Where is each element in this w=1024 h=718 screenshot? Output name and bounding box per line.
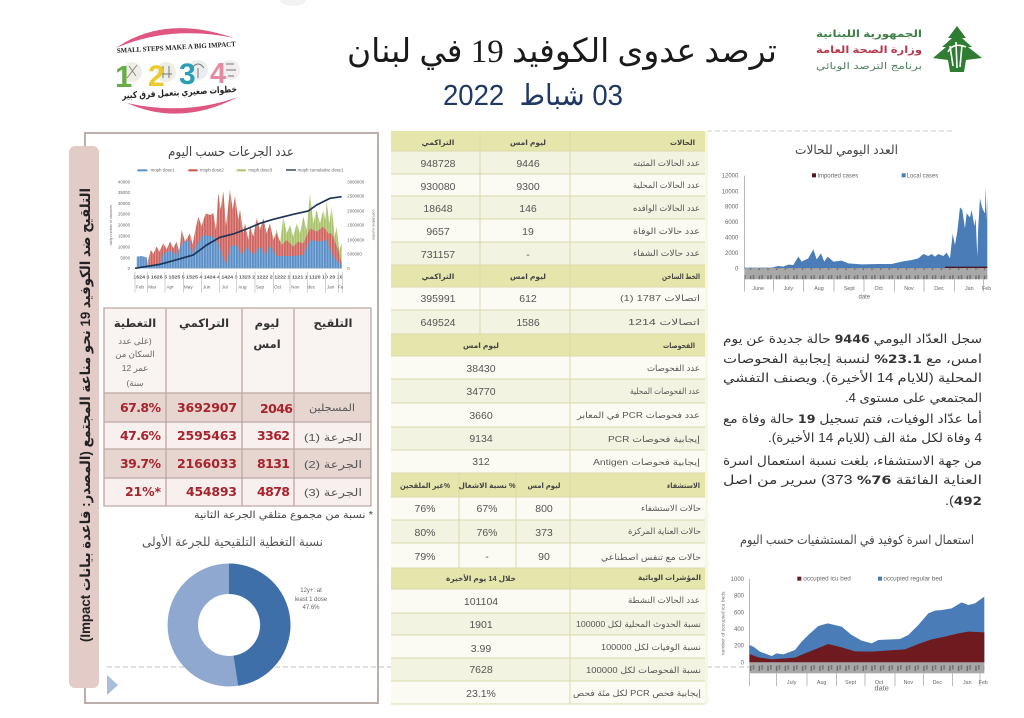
chart: daily vaccine doses: 10000	[118, 244, 131, 249]
chart: daily cases: 12000	[722, 174, 739, 180]
rows: tests: عدد الفحوصات المحلية	[630, 386, 700, 396]
chart: hospital bed occupancy: 600	[734, 610, 745, 616]
donut chart: first dose coverage: 47.6%	[302, 605, 320, 611]
rows: cases: 18648	[423, 203, 453, 215]
chart: daily cases: Local cases	[907, 173, 938, 179]
table: vaccination: المسجلين	[309, 403, 355, 414]
text block: daily summary: من جهة الاستشفاء، بلغت نسبة استعمال اسرة	[723, 454, 982, 469]
chart: hospital bed occupancy: July	[787, 680, 797, 686]
text block: daily summary: 4 وفاة لكل مئة الف (للايام 14 الأخيرة).	[768, 430, 982, 446]
chart: daily vaccine doses: 500000	[347, 252, 362, 257]
rows: epidemiological indicators: نسبة الحدوث المحلية لكل 100000	[576, 619, 701, 629]
rows: cases: عدد حالات الشفاء	[633, 248, 700, 258]
chart: daily vaccine doses: moph dose1	[151, 168, 175, 173]
table: vaccination: عمر 12	[122, 363, 148, 373]
rows: epidemiological indicators	[446, 573, 701, 700]
rows: hospitalisation: ليوم امس	[528, 481, 561, 490]
rows: hospitalisation: 80%	[414, 527, 436, 539]
chart: daily cases: 6000	[725, 220, 739, 226]
rows: tests: إيجابية فحوصات Antigen	[593, 457, 700, 468]
ministry wordmark: وزارة الصحة العامة	[816, 45, 922, 56]
chart: hospital bed occupancy: Sept	[845, 680, 857, 686]
logo: small steps make a big impact: 1	[115, 59, 132, 94]
logo: small steps make a big impact: 3	[179, 58, 196, 91]
chart: hospital bed occupancy: 0	[741, 660, 745, 666]
chart: daily vaccine doses: moph cumulative dose1	[298, 168, 344, 173]
chart: daily cases: 2000	[725, 251, 739, 257]
chart: daily vaccine doses: Feb	[136, 285, 144, 290]
chart: hospital bed occupancy	[720, 576, 988, 693]
ministry wordmark	[816, 29, 922, 71]
rows: cases: 930080	[420, 181, 456, 193]
chart: daily cases: 4000	[725, 235, 739, 241]
table: vaccination: 2166033	[177, 456, 237, 471]
chart: daily vaccine doses: May	[184, 285, 193, 290]
rows: hotline: 612	[519, 293, 537, 305]
rows: tests: عدد الفحوصات	[647, 363, 700, 373]
rows: tests: 38430	[466, 363, 496, 375]
rows: tests: عدد فحوصات PCR في المعابر	[576, 410, 700, 420]
chart: daily vaccine doses: 35000	[118, 190, 131, 195]
chart: daily vaccine doses: 25000	[118, 212, 131, 217]
rows: hospitalisation: %غير الملقحين	[400, 481, 450, 490]
chart: daily vaccine doses: 40000	[118, 179, 131, 184]
rows: cases: 9446	[516, 158, 540, 170]
table: vaccination: 3362	[257, 428, 290, 443]
rows: hotline: اتصالات 1214	[628, 317, 700, 327]
chart: hospital bed occupancy: Feb	[979, 680, 988, 686]
rows: hospitalisation: 90	[538, 551, 550, 563]
rows: hospitalisation: حالات العناية المركزة	[628, 526, 701, 536]
rows: tests: 34770	[466, 386, 496, 398]
table: vaccination: ليوم	[255, 318, 279, 331]
rows: hotline: 395991	[420, 293, 456, 305]
chart: daily cases: Aug	[814, 286, 824, 292]
chart: daily vaccine doses	[109, 168, 376, 293]
ministry wordmark: برنامج الترصد الوبائي	[816, 61, 922, 71]
chart: daily vaccine doses: Nov	[291, 285, 300, 290]
table: vaccination: 4878	[257, 484, 290, 499]
rows: hospitalisation: 76%	[414, 503, 436, 515]
chart: daily vaccine doses: Fe	[338, 285, 344, 290]
rows: hospitalisation	[400, 481, 701, 563]
table: vaccination: 2046	[260, 401, 293, 416]
chart: daily cases: Oct	[875, 286, 883, 292]
rows: tests: 3660	[469, 410, 493, 422]
chart: hospital bed occupancy: number of occupied icu beds	[720, 591, 726, 655]
chart: hospital bed occupancy: 800	[734, 594, 745, 600]
chart: hospital bed occupancy: Nov	[904, 680, 913, 686]
chart: daily vaccine doses: Jul	[222, 285, 228, 290]
chart: daily vaccine doses: moph dose3	[248, 168, 273, 173]
icon: cedar tree with hand	[933, 26, 982, 72]
rows: hospitalisation: 373	[535, 527, 553, 539]
ministry wordmark: الجمهورية اللبنانية	[816, 29, 922, 40]
chart: hospital bed occupancy: 400	[734, 627, 745, 633]
table: vaccination: سنة)	[126, 378, 144, 388]
text block: daily summary: المحلية (للايام 14 الأخيرة). ويصنف التفشي	[723, 370, 982, 386]
rows: tests: إيجابية فحوصات PCR	[608, 434, 700, 445]
rows: hospitalisation: 67%	[476, 503, 498, 515]
chart: hospital bed occupancy: Aug	[817, 680, 826, 686]
rows: hotline: التراكمي	[422, 272, 454, 281]
rows: epidemiological indicators: 7628	[469, 664, 493, 676]
rows: tests: ليوم امس	[463, 341, 499, 350]
chart: hospital bed occupancy: occupied icu bed	[803, 576, 851, 583]
rows: hotline: ليوم امس	[510, 272, 546, 281]
table: vaccination: الجرعة (2)	[304, 459, 362, 471]
text block: daily summary: 492).	[945, 494, 982, 508]
rows: tests: 312	[472, 456, 490, 468]
heading: doses per day: عدد الجرعات حسب اليوم	[168, 144, 294, 160]
text block: daily summary: أما عدّاد الوفيات، فتم تسجيل 19 حالة وفاة مع	[723, 410, 982, 427]
rows: epidemiological indicators: 3.99	[471, 643, 491, 655]
text block: daily summary: المجتمعي على مستوى 4.	[845, 391, 982, 406]
rows: hospitalisation: 800	[535, 503, 553, 515]
heading: hospital beds: استعمال اسرة كوفيد في المستشفيات حسب اليوم	[740, 533, 974, 548]
text block: daily summary	[723, 332, 982, 508]
logo: small steps make a big impact: 4	[210, 58, 226, 90]
rows: hospitalisation: الاستشفاء	[667, 481, 700, 490]
chart: hospital bed occupancy: Oct	[875, 680, 884, 686]
rows: hotline: 649524	[420, 317, 456, 329]
rows: tests	[463, 341, 700, 468]
donut chart: first dose coverage	[183, 564, 328, 686]
rows: hospitalisation: حالات مع تنفس اصطناعي	[601, 552, 701, 562]
chart: hospital bed occupancy: 200	[734, 644, 745, 650]
rows: epidemiological indicators: إيجابية فحص PCR لكل مئة فحص	[573, 688, 701, 699]
rows: hospitalisation: % نسبة الاشغال	[458, 481, 516, 490]
chart: daily vaccine doses: Sep	[256, 285, 265, 290]
table: vaccination: الجرعة (3)	[304, 487, 362, 499]
rows: epidemiological indicators: نسبة الفحوصات لكل 100000	[586, 665, 701, 675]
rows: cases: 19	[522, 226, 534, 238]
table: vaccination: التلقيح	[314, 318, 352, 330]
rows: cases	[420, 138, 700, 261]
chart: daily vaccine doses: 5000	[120, 255, 131, 260]
chart: daily vaccine doses: daily number of vaccines	[109, 205, 113, 245]
rows: hotline: الخط الساخن	[662, 272, 700, 281]
rows: cases: 731157	[421, 249, 455, 261]
table: vaccination	[104, 308, 371, 506]
table: vaccination: (على عدد	[118, 336, 152, 346]
chart: daily cases: 0	[735, 266, 739, 272]
rows: tests: الفحوصات	[663, 341, 695, 350]
table: vaccination: 454893	[186, 484, 237, 499]
logo: small steps make a big impact: SMALL STEPS MAKE A BIG IMPACT	[117, 40, 236, 55]
chart: hospital bed occupancy: occupied regular bed	[883, 576, 943, 583]
chart: daily vaccine doses: Mar	[148, 285, 157, 290]
chart: daily vaccine doses: Jun	[203, 285, 211, 290]
chart: hospital bed occupancy: Jan	[963, 680, 972, 686]
donut chart: first dose coverage: least 1 dose	[295, 597, 328, 603]
chart: daily vaccine doses: 15000	[118, 234, 131, 239]
rows: cases: عدد الحالات المحلية	[633, 180, 700, 190]
table: vaccination: 39.7%	[120, 456, 161, 471]
rows: epidemiological indicators: 101104	[464, 596, 498, 608]
chart: daily cases: Imported cases	[817, 173, 858, 179]
rows: hotline: اتصالات 1787 (1)	[620, 293, 700, 303]
chart: daily vaccine doses: moph dose2	[200, 168, 224, 173]
logo: small steps make a big impact	[114, 27, 242, 117]
chart: daily vaccine doses: 2000000	[347, 208, 365, 213]
table: vaccination: 8131	[257, 456, 290, 471]
rows: hospitalisation: -	[485, 551, 489, 563]
rows: epidemiological indicators: 23.1%	[466, 688, 496, 700]
table: vaccination: 21%*	[125, 484, 161, 499]
footnote: * نسبة من مجموع متلقي الجرعة الثانية	[194, 510, 373, 521]
chart: hospital bed occupancy: 1000	[731, 577, 745, 583]
table: vaccination: 3692907	[177, 400, 237, 415]
rows: epidemiological indicators: خلال 14 يوم الأخيرة	[446, 574, 516, 583]
rows: cases: الحالات	[670, 138, 695, 147]
rows: hospitalisation: 79%	[414, 551, 436, 563]
chart: daily vaccine doses: 3000000	[347, 179, 365, 184]
chart: daily cases: Sept	[844, 286, 855, 292]
chart: daily vaccine doses: 0	[128, 266, 131, 271]
text block: daily summary: امس، مع 23.1% لنسبة إيجابية الفحوصات	[723, 352, 982, 367]
logo: small steps make a big impact: 2	[148, 60, 165, 93]
chart: daily vaccine doses: 1000000	[347, 237, 365, 242]
rows: hospitalisation: 76%	[476, 527, 498, 539]
rows: cases: التراكمي	[422, 138, 454, 147]
chart: daily cases: June	[753, 286, 764, 292]
chart: daily vaccine doses: Aug	[238, 285, 247, 290]
chart: hospital bed occupancy: date	[875, 684, 889, 693]
chart: daily vaccine doses: Oct	[274, 285, 282, 290]
donut chart: first dose coverage: 12y+: at	[300, 588, 322, 594]
rows: cases: 9300	[516, 181, 540, 193]
table: vaccination: 2595463	[177, 428, 237, 443]
table: vaccination: السكان من	[115, 349, 155, 359]
chart: daily vaccine doses: 20000	[118, 223, 131, 228]
chart: daily vaccine doses: 0	[347, 266, 350, 271]
chart: daily cases: Jan	[965, 286, 974, 292]
rows: epidemiological indicators: المؤشرات الوبائية	[638, 573, 701, 582]
logo: small steps make a big impact: خطوات صغيري بتعمل فرق كبير	[121, 84, 237, 102]
table: vaccination: التراكمي	[179, 318, 229, 330]
chart: daily cases: 10000	[722, 189, 739, 195]
table: vaccination: الجرعة (1)	[304, 432, 362, 444]
date: 03 شباط 2022	[443, 80, 623, 112]
chart: daily vaccine doses: 1624 6 1626 5 1525 5 1525 4 1424 4 1424 3 1323 2 1222 2 1222 1 1121 1 1120 10 20 10	[133, 274, 343, 280]
chart: daily cases: 8000	[725, 205, 739, 211]
text block: daily summary: العناية الفائقة 76% ⁦(373⁩ سرير من اصل	[723, 473, 982, 488]
rows: hotline: 1586	[516, 317, 540, 329]
chart: daily cases: Dec	[934, 286, 944, 292]
chart: daily vaccine doses: dec	[308, 285, 316, 290]
rows: cases: عدد الحالات الوافده	[633, 203, 700, 213]
table: daily data	[391, 131, 708, 704]
chart: daily vaccine doses: 1500000	[347, 223, 365, 228]
rows: tests: 9134	[469, 433, 493, 445]
rows: cases: عدد الحالات المثبته	[633, 158, 700, 168]
rows: cases: 9657	[426, 226, 450, 238]
table: vaccination: 67.8%	[120, 400, 161, 415]
rows: epidemiological indicators: نسبة الوفيات لكل 100000	[601, 642, 701, 652]
heading: daily cases: العدد اليومي للحالات	[795, 143, 898, 158]
text block: daily summary: سجل العدّاد اليومي 9446 حالة جديدة عن يوم	[723, 332, 982, 347]
rows: cases: عدد حالات الوفاة	[633, 226, 700, 236]
rows: hotline	[420, 272, 700, 329]
chart: daily vaccine doses: Apr	[166, 285, 174, 290]
chart: daily cases	[722, 173, 991, 300]
chart: daily vaccine doses: Jan	[327, 285, 335, 290]
rows: epidemiological indicators: عدد الحالات النشطة	[628, 595, 700, 605]
rows: cases: ليوم امس	[510, 138, 546, 147]
table: vaccination: 47.6%	[120, 428, 161, 443]
table: vaccination: التغطية	[114, 318, 156, 330]
chart: hospital bed occupancy: Dec	[933, 680, 942, 686]
chart: daily vaccine doses: cumulative number	[372, 210, 376, 241]
chart: daily vaccine doses: 30000	[118, 201, 131, 206]
heading: first dose coverage: نسبة التغطية التلقيحية للجرعة الأولى	[142, 534, 323, 550]
panel: vaccination	[85, 133, 378, 703]
chart: daily vaccine doses: 2500000	[347, 194, 365, 199]
rows: cases: -	[526, 249, 530, 261]
chart: daily cases: Feb	[982, 286, 991, 292]
rows: hospitalisation: حالات الاستشفاء	[641, 503, 701, 513]
sidebar: vaccination vertical title	[69, 146, 99, 688]
sidebar: vaccination vertical title: التلقيح ضد الكوفيد 19 نحو مناعة المجتمع (المصدر: قاعدة بيانات Impact)	[77, 188, 94, 642]
chart: daily cases: date	[858, 294, 871, 300]
table: vaccination: امس	[253, 339, 281, 351]
rows: cases: 948728	[420, 158, 456, 170]
title: ترصد عدوى الكوفيد 19 في لبنان	[347, 34, 777, 70]
rows: epidemiological indicators: 1901	[469, 619, 493, 631]
chart: daily cases: Nov	[904, 286, 914, 292]
rows: cases: 146	[519, 203, 537, 215]
arrow: next slide marker	[107, 675, 118, 695]
chart: daily cases: July	[784, 286, 793, 292]
